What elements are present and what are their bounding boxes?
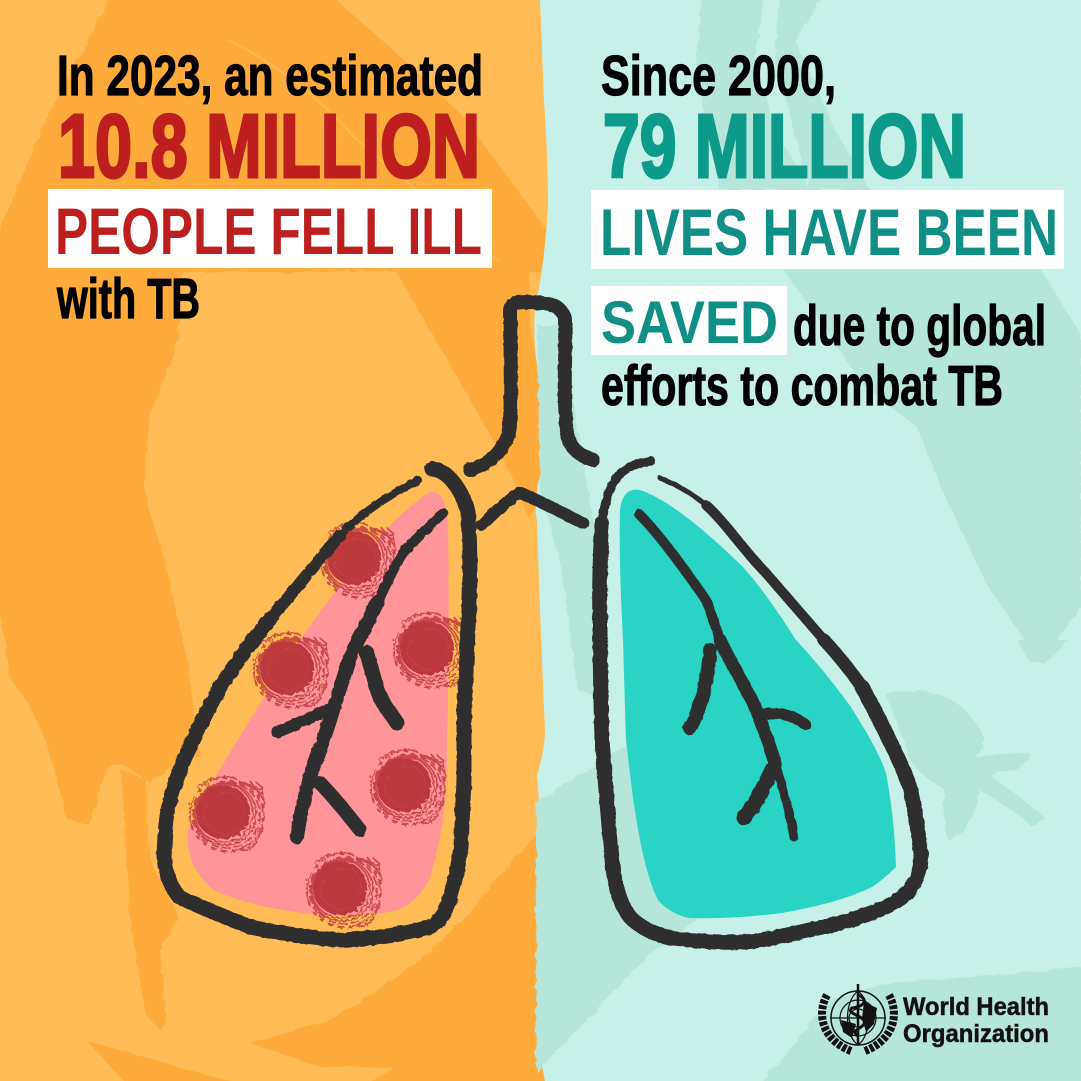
WHO logo — [822, 984, 1056, 1051]
WHO name: World Health — [903, 993, 1049, 1021]
spot 3 — [394, 613, 468, 688]
label text: people fell ill: PEOPLE FELL ILL — [55, 194, 482, 268]
globe — [830, 991, 886, 1045]
text: with TB: with TB — [56, 267, 200, 331]
spot 1 — [321, 523, 395, 598]
WHO name: Organization — [903, 1020, 1049, 1048]
spot 4 — [190, 777, 264, 852]
background: left orange panel — [0, 0, 560, 1081]
staff with serpent — [850, 984, 864, 1044]
label text: saved: SAVED — [601, 289, 778, 356]
heading: 10.8 million: 10.8 MILLION — [58, 97, 480, 197]
label: white box saved — [591, 286, 787, 355]
left lung outline and bronchi — [164, 469, 470, 940]
background: right mint panel — [534, 0, 1081, 1081]
spot 2 — [254, 633, 328, 708]
spots — [190, 523, 468, 928]
laurel wreath — [822, 995, 894, 1051]
right lung — [600, 461, 921, 942]
right lung teal fill — [620, 490, 896, 918]
heading: left intro line: In 2023, an estimated — [57, 44, 483, 108]
continents — [841, 1002, 877, 1038]
trachea and main bronchi — [470, 302, 593, 525]
left lung pink fill — [188, 492, 449, 915]
right lung outline and bronchi — [600, 461, 921, 942]
spot 6 — [307, 853, 381, 928]
heading: since 2000: Since 2000, — [601, 44, 836, 108]
WHO emblem — [822, 984, 894, 1051]
spot 5 — [371, 750, 445, 825]
label: white box people fell ill — [48, 189, 492, 268]
left lung — [164, 469, 470, 940]
label: white box lives have been — [591, 190, 1064, 269]
